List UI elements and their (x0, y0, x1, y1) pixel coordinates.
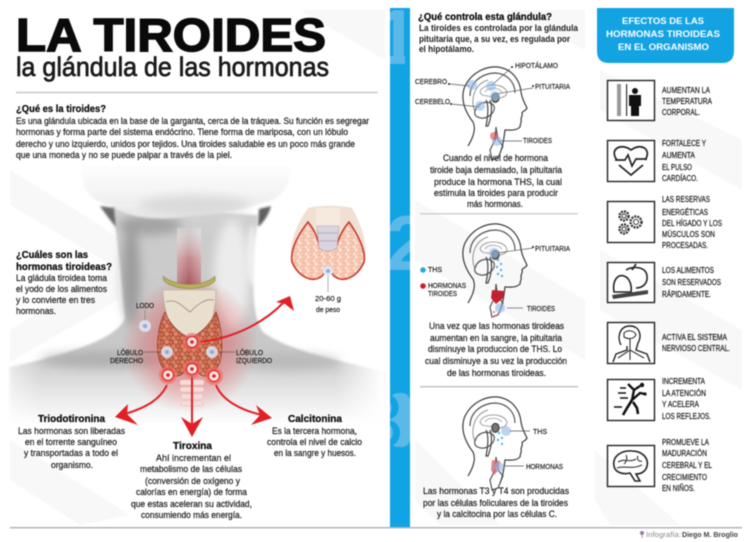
text: effect 5 (662, 333, 730, 353)
red target markers (159, 333, 223, 385)
text block: tiroxina: que estas aceleran su actividad, (131, 499, 252, 509)
hyoid band (163, 276, 215, 288)
ears (100, 206, 116, 227)
text: effect 7: MADURACIÓN (662, 449, 707, 458)
text: effect 2: EL PULSO (662, 163, 692, 172)
diagram: head 1: CEREBELO (415, 97, 450, 106)
diagram: head 1 (415, 61, 570, 160)
text block: calcitonina: Calcitonina (288, 414, 342, 425)
text: effect 3: MÚSCULOS SON (662, 230, 715, 239)
text block: tiroxina: Tiroxina (173, 441, 212, 452)
diagram: head 3: HORMONAS (526, 462, 563, 471)
labels: DERECHO (110, 356, 143, 365)
text block: step 2: cual disminuye a su vez la producción (425, 356, 567, 366)
blue number bar (390, 8, 410, 527)
panel: qué controla: pituitaria que, a su vez, es regulada por (419, 34, 570, 44)
text block: step 2: disminuye la produccion de THS. Lo (428, 344, 562, 354)
text block: cuáles son las hormonas (16, 250, 112, 316)
icon: nervous system (608, 322, 654, 364)
text block: qué es la tiroides: que una moneda y no se puede palpar a través de la piel. (16, 150, 232, 160)
text: effect 7: PROMUEVE LA (662, 438, 710, 447)
icon: heart pulse (608, 140, 654, 182)
text block: step 1: Cuando el nivel de hormona (443, 153, 548, 163)
labels: LÓBULO (117, 348, 143, 357)
text: effect 1: TEMPERATURA (662, 97, 713, 106)
red glow (122, 277, 258, 413)
text: effect 4: LOS ALIMENTOS (662, 266, 714, 275)
text block: cuáles son las hormonas: ¿Cuáles son las (16, 250, 88, 261)
text block: step 1: tiroide baja demasiado, la pituitaria (430, 165, 562, 175)
numeral 3 (390, 392, 410, 448)
credit: Diego M. Broglio (682, 530, 738, 539)
text: effect 3: PROCESADAS. (662, 241, 708, 250)
arrow: calcitonina (216, 385, 272, 425)
text block: step 1: más hormonas. (467, 199, 523, 209)
labels: LÓBULO (236, 348, 263, 357)
panel: qué controla: ¿Qué controla esta glándula? (418, 12, 552, 23)
labels (110, 301, 272, 365)
thyroid lobes (158, 312, 222, 376)
icon: gears (608, 202, 654, 242)
icon: thermometer and person (608, 80, 654, 120)
title: LA TIROIDES (16, 9, 326, 61)
arrow: tiroxina (181, 376, 203, 437)
text: effect 2: FORTALECE Y (662, 139, 707, 148)
text block: calcitonina: Es la tercera hormona, (272, 426, 357, 436)
diagram: head 2: TIROIDES (527, 304, 555, 313)
illustration: enlarged thyroid (291, 206, 366, 314)
text block: step 1: estimula la tiroides para producir (434, 188, 558, 198)
text block: cuáles son las hormonas: y lo convierte en tres (16, 295, 95, 305)
text: effect 3: ENERGÉTICAS (662, 208, 708, 217)
text block: cuáles son las hormonas: hormonas. (16, 306, 56, 316)
numeral 3: 3 (361, 379, 403, 464)
icon: brain (608, 446, 654, 486)
text block: triodotironina: en el torrente sanguíneo (25, 437, 117, 447)
illustration: enlarged thyroid: de peso (316, 305, 340, 314)
text block: qué es la tiroides (16, 104, 369, 160)
legend: THS and hormonas (420, 265, 466, 298)
text block: triodotironina: y transportadas a todo el (24, 448, 118, 458)
text: effect 7: CEREBRAL Y EL (662, 461, 712, 470)
text block: qué es la tiroides: hormonas y forma parte del sistema endócrino. Tiene forma de mariposa, con un lóbulo (16, 127, 348, 137)
panel header: efectos: EN EL ORGANISMO (618, 42, 709, 52)
diagram: head 1: CEREBRO (415, 77, 447, 86)
labels: IZQUIERDO (236, 356, 272, 365)
diagram: head 2 (463, 224, 570, 318)
trachea tube (177, 228, 201, 284)
text block: tiroxina: consumiendo más energía. (141, 510, 242, 520)
illustration: enlarged thyroid: 20-60 g (315, 294, 341, 303)
text block: step 2: Una vez que las hormonas tiroideas (429, 321, 564, 331)
text block: triodotironina: Las hormonas son liberadas (18, 426, 125, 436)
text block: triodotironina: organismo. (51, 460, 93, 470)
icon: food (608, 262, 654, 302)
legend: THS and hormonas: HORMONAS (428, 281, 466, 290)
neck and shoulders (10, 205, 384, 430)
numeral 2: 2 (386, 199, 429, 287)
text: effect 6: INCREMENTA (662, 377, 706, 386)
panel: qué controla: La tiroides es controlada por la glándula (419, 23, 579, 33)
text: effect 6: LOS REFLEJOS. (662, 412, 711, 421)
text block: qué es la tiroides: derecho y uno izquierdo, unidos por tejidos. Una tiroides saludable es un poco más grande (16, 139, 355, 149)
text: effect 5: ACTIVA EL SISTEMA (662, 333, 728, 342)
larynx (163, 290, 216, 340)
panel header: efectos (597, 8, 734, 63)
text block: step 3 (423, 486, 569, 519)
text block: step 2: de las hormonas tiroideas. (447, 368, 546, 378)
text block: step 1: produce la hormona THS, la cual (434, 177, 562, 187)
panel: qué controla: el hipotálamo. (419, 44, 474, 54)
text block: step 3: Las hormonas T3 y T4 son producidas (423, 486, 569, 496)
labels: LODO (136, 301, 154, 310)
text: effect 2: AUMENTA (662, 151, 696, 160)
credit: Infografía: (646, 530, 681, 539)
legend: THS and hormonas: THS (428, 265, 442, 274)
text block: calcitonina: en la sangre y huesos. (274, 448, 356, 458)
text: effect 7: CRECIMIENTO (662, 473, 707, 482)
text block: tiroxina: calorías en energía) de forma (136, 487, 247, 497)
text: effect 3: DEL HÍGADO Y LOS (662, 219, 722, 228)
text block: step 2 (425, 321, 567, 378)
text: effect 4: RÁPIDAMENTE. (662, 290, 711, 299)
diagram: head 3 (463, 397, 563, 490)
text: effect 7: EN NIÑOS. (662, 484, 695, 493)
text block: step 3: por las células foliculares de la tiroides (423, 498, 568, 508)
text: effect 4 (662, 266, 721, 299)
text: effect 3: LAS RESERVAS (662, 195, 710, 204)
diagram: head 3: THS (533, 427, 547, 436)
text: effect 5: NERVIOSO CENTRAL. (662, 344, 730, 353)
text: effect 7 (662, 438, 712, 493)
arrow: to enlarged thyroid (200, 296, 294, 342)
panel header: efectos: EFECTOS DE LAS (622, 16, 704, 26)
text: effect 1: CORPORAL. (662, 108, 700, 117)
icon: running figure (608, 380, 654, 420)
panel: qué controla (418, 12, 579, 54)
trachea rings (180, 380, 204, 406)
text block: cuáles son las hormonas: hormonas tiroideas? (16, 262, 112, 273)
text block: step 3: y la calcitocina por las células C. (437, 509, 557, 519)
credit (640, 530, 738, 539)
text: effect 6: LA ATENCIÓN (662, 389, 706, 398)
text block: cuáles son las hormonas: el yodo de los alimentos (16, 284, 107, 294)
diagram: head 1: TIROIDES (523, 136, 552, 145)
text: effect 4: SON RESERVADOS (662, 278, 721, 287)
text: effect 2: CARDÍACO. (662, 174, 698, 183)
text block: qué es la tiroides: ¿Qué es la tiroides? (16, 104, 106, 115)
text block: triodotironina: Triodotironina (38, 414, 105, 425)
text block: calcitonina: controla el nivel de calcio (267, 437, 362, 447)
text block: qué es la tiroides: Es una glándula ubicada en la base de la garganta, cerca de la tráquea. Su función es segregar (16, 116, 369, 126)
panel header: efectos: HORMONAS TIROIDEAS (606, 29, 720, 39)
text block: calcitonina (267, 414, 362, 458)
text block: tiroxina: Ahí incrementan el (156, 453, 231, 463)
blue markers (139, 310, 235, 358)
text block: tiroxina: (conversión de oxígeno y (145, 476, 240, 486)
text: effect 6: Y ACELERA (662, 400, 700, 409)
diagram: head 2: PITUITARIA (535, 244, 570, 253)
legend: THS and hormonas: TIROIDES (428, 289, 457, 298)
text block: triodotironina (18, 414, 125, 470)
title (16, 9, 329, 82)
diagram: head 1: HIPOTÁLAMO (515, 61, 558, 70)
text block: tiroxina: metabolismo de las células (140, 464, 242, 474)
text: effect 1: AUMENTAN LA (662, 86, 711, 95)
text block: step 1 (430, 153, 562, 209)
subtitle: la glándula de las hormonas (16, 52, 329, 82)
arrow: triodotironina (115, 385, 167, 425)
diagram: head 1: PITUITARIA (535, 82, 570, 91)
text: effect 6 (662, 377, 711, 421)
text block: cuáles son las hormonas: La gládula tiroidea toma (16, 273, 107, 283)
text: effect 2 (662, 139, 707, 183)
jaw (82, 165, 290, 218)
text block: tiroxina (131, 441, 252, 520)
text: effect 3 (662, 195, 722, 250)
illustration: neck with thyroid (10, 165, 384, 432)
text block: step 2: aumentan en la sangre, la pituitaria (430, 333, 562, 343)
text: effect 1 (662, 86, 713, 117)
